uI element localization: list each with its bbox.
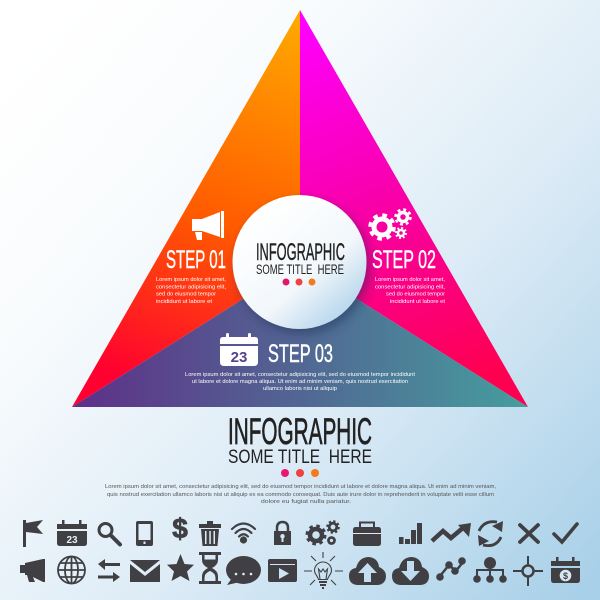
step 02 text: Lorem ipsum dolor sit amet,	[375, 277, 445, 283]
icon: flag	[23, 520, 43, 547]
icon: megaphone	[20, 559, 45, 582]
icon: calendar dollar	[551, 557, 580, 583]
centre title	[256, 239, 345, 286]
icon: wifi	[232, 524, 255, 542]
centre title: INFOGRAPHIC	[256, 239, 345, 266]
step 01 text	[156, 277, 226, 305]
step 01 text: incididunt ut labore et	[156, 299, 213, 305]
triangle diagram	[72, 10, 528, 407]
icon: speech bubble	[226, 556, 261, 585]
icon: transfer arrows	[98, 559, 120, 582]
icon: cross	[520, 525, 538, 542]
icon: dollar: $	[172, 513, 188, 544]
icon: check	[554, 524, 577, 542]
icon row 2	[20, 552, 580, 588]
icon: gears	[307, 521, 339, 544]
icon: gears white	[370, 210, 410, 239]
panel: step 02	[300, 10, 528, 407]
step 01 text: Lorem ipsum dolor sit amet,	[156, 277, 226, 283]
step 03 text	[185, 372, 416, 392]
step 01 heading: STEP 01	[166, 246, 226, 274]
icon: line nodes	[436, 557, 466, 581]
panel: step 01	[72, 10, 300, 407]
step 03 text: Lorem ipsum dolor sit amet, consectetur adipisicing elit, sed do eiusmod tempor incididunt	[185, 372, 416, 378]
icon: cloud upload	[349, 557, 386, 585]
step 03 text: ut labore et dolore magna aliqua. Ut enim ad minim veniam, quis nostrud exercitation	[192, 379, 408, 385]
icon: trash	[199, 521, 221, 546]
icon: megaphone white	[192, 211, 224, 240]
description	[105, 484, 496, 505]
icon: calendar white: 23	[231, 349, 247, 366]
step 02 text: sed do eiusmod tempor	[386, 292, 445, 298]
step 01 text: consectetur adipisicing elit,	[156, 284, 226, 290]
icon: padlock	[274, 522, 291, 545]
icon: cloud download	[392, 557, 429, 585]
step 02 text: consectetur adipisicing elit,	[375, 284, 445, 290]
centre title: SOME TITLE HERE	[256, 262, 344, 277]
icon: calendar: 23	[66, 535, 78, 546]
icon: sync	[478, 521, 503, 546]
icon: video player	[268, 559, 297, 582]
icon: calendar dollar: $	[563, 571, 568, 581]
icon row 1	[23, 513, 577, 547]
main title: INFOGRAPHIC	[228, 411, 372, 452]
icon: magnifier	[99, 524, 120, 544]
icon: trend arrow	[432, 523, 471, 541]
step 01 text: sed do eiusmod tempor	[156, 292, 216, 298]
icon: star	[167, 554, 194, 581]
centre circle	[232, 195, 366, 329]
step 03 text: ullamco laboris nisi ut aliquip	[263, 386, 337, 392]
icon: calendar	[57, 520, 87, 546]
panel: step 03	[72, 263, 528, 407]
step 02 text: incididunt ut labore et	[390, 299, 446, 305]
icon: org chart	[473, 557, 507, 583]
icon: crosshair	[513, 556, 543, 586]
step 02 heading: STEP 02	[372, 246, 436, 274]
description: quis nostrud exercitation ullamco laboris nisi ut aliquip ex ea commodo consequat. Duis aute irure dolor in reprehenderit in voluptate velit esse cillum	[107, 492, 494, 498]
description: Lorem ipsum dolor sit amet, consectetur adipisicing elit, sed do eiusmod tempor incididunt ut labore et dolore magna aliqua. Ut enim ad minim veniam,	[105, 484, 496, 490]
icon: briefcase	[353, 522, 381, 546]
icon: bar chart	[399, 523, 422, 544]
circle shadow	[236, 200, 370, 334]
step 03 heading: STEP 03	[268, 340, 333, 368]
icon: envelope	[130, 560, 160, 582]
main title	[228, 411, 372, 468]
title dots	[281, 469, 319, 477]
icon: tablet phone	[136, 521, 153, 546]
description: dolore eu fugiat nulla pariatur.	[261, 499, 351, 505]
main title: SOME TITLE HERE	[228, 446, 372, 468]
icon: globe	[58, 556, 85, 584]
icon: calendar white	[220, 333, 258, 366]
icon: hourglass	[199, 552, 221, 584]
icon: light bulb	[304, 552, 343, 588]
step 02 text	[375, 277, 446, 305]
